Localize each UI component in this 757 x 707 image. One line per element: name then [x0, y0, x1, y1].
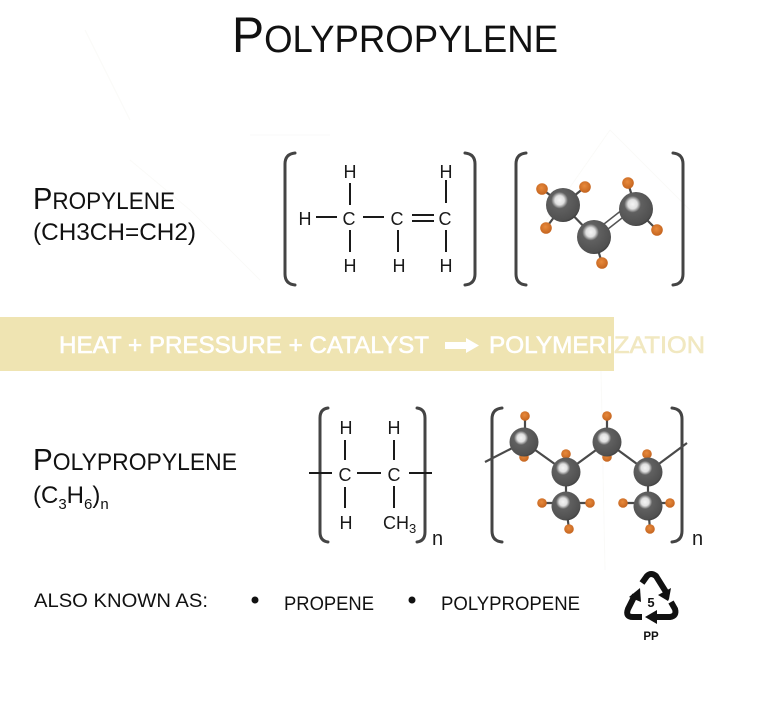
also known as: ALSO KNOWN AS: — [34, 591, 208, 612]
structural formula: propylene: C — [390, 209, 404, 229]
structural formula: polypropylene: H — [340, 513, 352, 533]
icon: recycling symbol 5 PP: 5 — [647, 595, 655, 610]
structural formula: polypropylene: 3 — [409, 521, 416, 536]
structural formula: polypropylene: C — [388, 465, 400, 485]
structural formula: propylene — [285, 153, 475, 285]
icon: recycling symbol 5 PP — [627, 574, 675, 643]
title: POLYPROPYLENE — [232, 7, 558, 63]
label: polypropylene — [33, 442, 237, 513]
structural formula: propylene: H — [344, 162, 356, 182]
label: polypropylene: 6 — [84, 496, 92, 513]
structural formula: polypropylene: H — [340, 418, 352, 438]
also known as: POLYPROPENE — [441, 594, 580, 615]
structural formula: propylene: H — [344, 256, 356, 276]
arrow — [445, 338, 479, 353]
ball-and-stick model: propylene — [516, 153, 683, 285]
structural formula: polypropylene: H — [388, 418, 400, 438]
label: polypropylene: n — [100, 496, 109, 513]
banner: heat + pressure + catalyst: POLYMERI — [489, 332, 613, 359]
structural formula: propylene: C — [438, 209, 452, 229]
label: polypropylene: 3 — [58, 496, 67, 513]
structural formula: propylene: H — [298, 209, 312, 229]
label: polypropylene: (C — [33, 482, 58, 509]
structural formula: propylene: C — [342, 209, 356, 229]
structural formula: polypropylene: n — [432, 528, 443, 550]
also known as: PROPENE — [284, 594, 374, 615]
structural formula: polypropylene: C — [338, 465, 352, 485]
label: polypropylene: ) — [92, 482, 100, 509]
banner: heat + pressure + catalyst: HEAT + PRESSURE + CATALYST — [59, 332, 429, 359]
structural formula: polypropylene: CH — [383, 513, 409, 533]
label: propylene: PROPYLENE — [33, 181, 175, 216]
icon: recycling symbol 5 PP: PP — [643, 631, 659, 643]
label: propylene: (CH3CH=CH2) — [33, 219, 196, 246]
banner: heat + pressure + catalyst: ZATION — [614, 332, 705, 359]
also known as — [34, 591, 580, 615]
banner: heat + pressure + catalyst — [0, 317, 705, 371]
structural formula: propylene: H — [440, 162, 452, 182]
label: polypropylene: POLYPROPYLENE — [33, 442, 237, 477]
ball-and-stick model: polypropylene: n — [692, 528, 703, 550]
structural formula: polypropylene — [309, 408, 443, 550]
ball-and-stick model: polypropylene — [485, 408, 703, 550]
label: polypropylene: H — [67, 482, 84, 509]
structural formula: propylene: H — [440, 256, 452, 276]
structural formula: propylene: H — [392, 256, 406, 276]
label: propylene — [33, 181, 196, 246]
